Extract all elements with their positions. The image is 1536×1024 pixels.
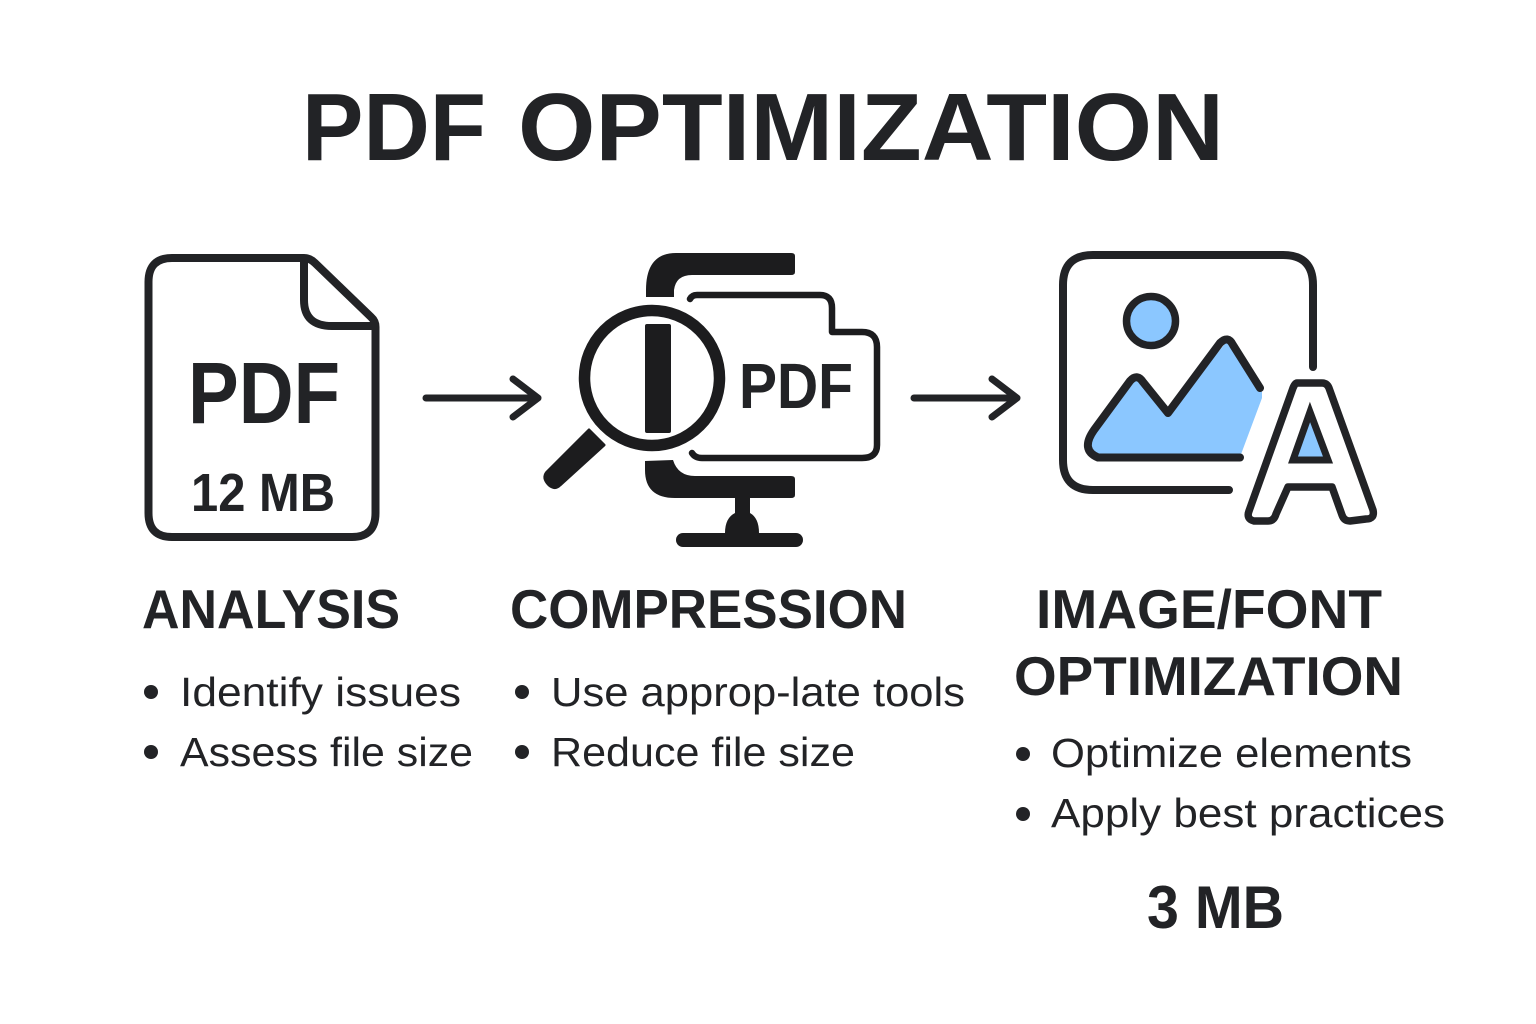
- bullet list: compression: Use approp-late tools: [551, 669, 965, 715]
- bullet list: compression: Reduce file size: [551, 729, 855, 775]
- panel: analysis: [142, 258, 473, 775]
- title: OPTIMIZATION: [518, 74, 1224, 181]
- bullet list: analysis: Assess file size: [180, 729, 473, 775]
- icon: PDF document 12 MB: [148, 258, 376, 537]
- heading: image/font optimization: OPTIMIZATION: [1014, 645, 1403, 707]
- heading: compression: COMPRESSION: [510, 578, 907, 640]
- panel: compression: [510, 253, 965, 775]
- heading: analysis: ANALYSIS: [142, 578, 400, 640]
- icon: monitor with magnifier and PDF: [545, 253, 877, 547]
- icon: PDF document 12 MB: PDF: [188, 345, 340, 442]
- bullet list: analysis: [144, 669, 473, 775]
- panel: image and font optimization: [1014, 255, 1445, 941]
- heading: image/font optimization: IMAGE/FONT: [1036, 578, 1382, 640]
- heading: image/font optimization: [1014, 578, 1403, 707]
- bullet list: image and font optimization: [1016, 730, 1445, 836]
- icon: PDF document 12 MB: 12 MB: [191, 463, 335, 523]
- bullet list: analysis: Identify issues: [180, 669, 461, 715]
- result size: 3 MB: 3 MB: [1147, 874, 1284, 941]
- icon: image and letter A: [1063, 255, 1373, 521]
- arrow: analysis to compression: [426, 379, 538, 417]
- bullet list: compression: [515, 669, 965, 775]
- title: PDF: [302, 74, 486, 181]
- bullet list: image and font optimization: Apply best practices: [1051, 790, 1445, 836]
- icon: monitor with magnifier and PDF: PDF: [739, 350, 853, 422]
- bullet list: image and font optimization: Optimize elements: [1051, 730, 1412, 776]
- arrow: compression to optimization: [914, 379, 1017, 417]
